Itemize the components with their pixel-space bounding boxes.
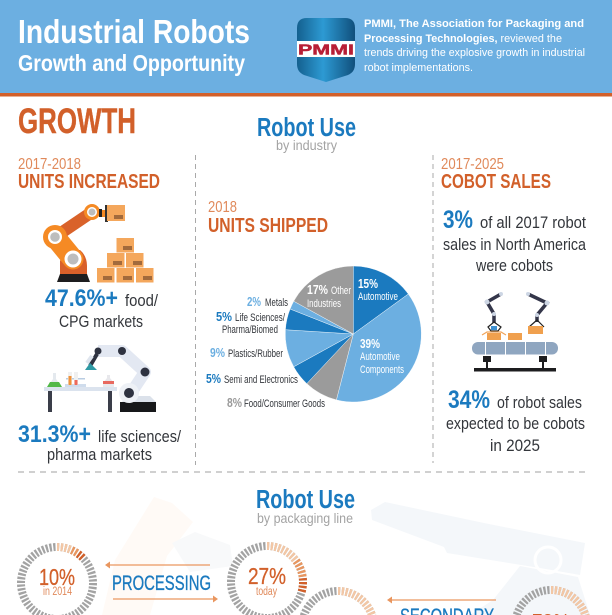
heading: cobot sales: 2017-2025 xyxy=(441,156,504,173)
pie labels inside: 39% xyxy=(360,337,380,351)
stat: life sciences and pharma markets: life sciences/ xyxy=(98,428,181,446)
stat: food and CPG markets: CPG markets xyxy=(59,313,143,331)
pie labels outside: Metals xyxy=(265,297,288,309)
gauge: fourth packaging ring xyxy=(515,590,587,615)
icon: PMMI logo: PMMI xyxy=(298,42,354,58)
panel: processing xyxy=(7,532,317,615)
PMMI description: robot implementations. xyxy=(364,62,473,74)
background robot watermark xyxy=(102,497,590,615)
stat: life sciences and pharma markets: 31.3%+ xyxy=(18,421,91,448)
gauge: 27 percent today xyxy=(217,532,317,615)
pie labels outside: Plastics/Rubber xyxy=(228,348,283,360)
pie labels outside xyxy=(206,295,325,410)
panel: units shipped xyxy=(206,199,421,410)
arrow: left xyxy=(105,562,210,568)
stat: 34 percent: 34% xyxy=(448,386,490,414)
pie labels outside: Pharma/Biomed xyxy=(222,324,278,336)
stat: food and CPG markets: food/ xyxy=(125,292,158,310)
stat: 34 percent: in 2025 xyxy=(490,437,540,455)
pie labels outside: Life Sciences/ xyxy=(235,312,285,324)
stat: 3 percent: sales in North America xyxy=(443,236,587,254)
gauge: 27 percent today: 27% xyxy=(248,563,286,589)
title xyxy=(18,13,250,76)
stat: life sciences and pharma markets xyxy=(18,421,181,464)
heading: growth: GROWTH xyxy=(18,102,136,141)
stat: 3 percent: 3% xyxy=(443,206,473,234)
heading: units increased: 2017-2018 xyxy=(18,156,81,173)
pie labels inside: Industries xyxy=(307,298,341,310)
header band xyxy=(0,0,612,96)
stat: 34 percent: of robot sales xyxy=(497,394,582,412)
heading: units increased xyxy=(18,156,160,193)
icon: cobots over conveyor xyxy=(472,292,558,372)
arrow: right xyxy=(113,596,218,602)
PMMI description: PMMI, The Association for Packaging and xyxy=(364,18,584,30)
pie labels outside: Food/Consumer Goods xyxy=(244,398,325,410)
pie labels outside: Semi and Electronics xyxy=(224,374,298,386)
heading: robot use by industry xyxy=(257,114,356,153)
pie chart xyxy=(285,266,421,402)
stat: life sciences and pharma markets: pharma markets xyxy=(47,446,152,464)
PMMI description xyxy=(364,18,585,74)
pie labels inside: Other xyxy=(331,285,351,297)
PMMI description: trends driving the explosive growth in industrial xyxy=(364,47,585,59)
pie labels outside: 9% xyxy=(210,346,225,360)
icon: orange robot arm with boxes xyxy=(43,204,154,282)
PMMI description: Processing Technologies, reviewed the xyxy=(364,33,562,45)
pie labels inside xyxy=(307,277,404,376)
heading: units shipped xyxy=(208,199,328,237)
heading: robot use by packaging line: by packaging line xyxy=(257,510,353,526)
arrow: left xyxy=(387,596,496,604)
heading: cobot sales xyxy=(441,156,551,193)
heading: robot use by industry: by industry xyxy=(276,138,337,153)
stat: food and CPG markets xyxy=(45,285,158,331)
pie labels outside: 5% xyxy=(216,310,232,324)
heading: robot use by packaging line xyxy=(256,486,355,526)
stat: 3 percent: were cobots xyxy=(475,257,553,275)
panel: secondary xyxy=(302,590,587,615)
title: Industrial Robots xyxy=(18,13,250,50)
stat: 34 percent: expected to be cobots xyxy=(446,415,585,433)
pie labels inside: Automotive xyxy=(358,291,398,303)
heading: units shipped: 2018 xyxy=(208,199,237,216)
stat: food and CPG markets: 47.6%+ xyxy=(45,285,118,312)
gauge: 27 percent today: today xyxy=(256,586,277,598)
title: Growth and Opportunity xyxy=(18,50,245,76)
pie labels inside: Components xyxy=(360,364,404,376)
pie labels inside: 17% xyxy=(307,283,328,297)
stat: 3 percent: of all 2017 robot xyxy=(480,214,586,232)
pie labels outside: 2% xyxy=(247,295,261,309)
pie labels outside: 8% xyxy=(227,396,242,410)
heading: robot use by industry: Robot Use xyxy=(257,114,356,142)
panel: units increased xyxy=(18,156,181,464)
icon: PMMI logo xyxy=(297,18,355,82)
stat: 3 percent xyxy=(443,206,587,275)
pie labels inside: 15% xyxy=(358,277,378,291)
heading: robot use by packaging line: Robot Use xyxy=(256,486,355,514)
heading: cobot sales: COBOT SALES xyxy=(441,171,551,193)
heading: units increased: UNITS INCREASED xyxy=(18,171,160,193)
gauge: 10 percent in 2014: in 2014 xyxy=(43,586,72,598)
heading: units shipped: UNITS SHIPPED xyxy=(208,215,328,237)
gauge: third packaging ring xyxy=(302,591,374,615)
pie labels inside: Automotive xyxy=(360,351,400,363)
icon: lab robot at table xyxy=(44,347,156,412)
gauge: 10 percent in 2014: 10% xyxy=(39,564,75,590)
gauge: 10 percent in 2014 xyxy=(7,533,107,615)
panel: cobot sales xyxy=(441,156,587,455)
pie labels outside: 5% xyxy=(206,372,221,386)
stat: 34 percent xyxy=(446,386,585,455)
label: processing: PROCESSING xyxy=(112,572,211,595)
